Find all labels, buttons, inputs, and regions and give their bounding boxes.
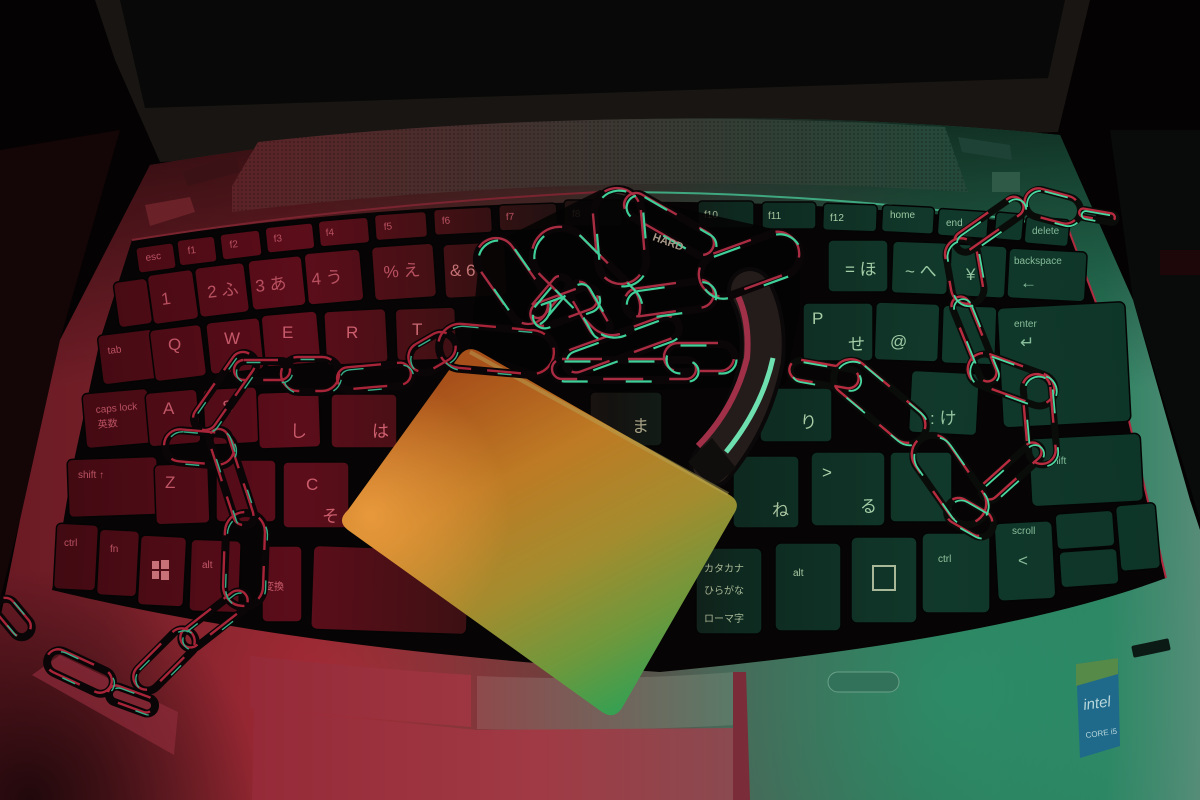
function key row: esc [145, 251, 162, 264]
QWERTY key row: W [224, 329, 240, 348]
number key row: % え [383, 260, 421, 282]
port slot [1131, 638, 1171, 658]
function key row: f4 [325, 227, 335, 239]
touchpad surface [252, 708, 735, 800]
home key row: し [290, 422, 307, 441]
home key row: S [222, 397, 233, 416]
QWERTY key row: @ [890, 332, 907, 351]
function key row: f12 [830, 213, 844, 224]
number key row: & 6 [450, 261, 476, 280]
function key row: f2 [229, 239, 239, 251]
side reflections [0, 130, 1200, 600]
number key row: ~ へ [905, 262, 937, 281]
bottom key row: alt [202, 560, 213, 571]
left touchpad button [250, 656, 471, 727]
function key row: f11 [768, 211, 782, 222]
right touchpad button [477, 672, 735, 730]
lower key row: > [822, 463, 832, 482]
central chain pile [468, 186, 808, 382]
home key row: 英数 [97, 416, 118, 431]
bottom key row: fn [110, 544, 118, 555]
keyboard well [52, 202, 1166, 672]
home key row: は [372, 422, 389, 441]
home key row: A [163, 399, 175, 418]
lower key row: る [860, 497, 877, 516]
QWERTY key row: せ [848, 335, 865, 354]
lower key row: shift ↑ [78, 470, 104, 481]
number key row: 1 [160, 289, 172, 309]
hinge clips [145, 137, 1020, 226]
QWERTY key row: P [812, 309, 823, 328]
number key row: ← [1020, 273, 1037, 292]
number key row [113, 240, 1087, 328]
bottom key row: 変換 [264, 580, 284, 593]
windows key icon [152, 560, 169, 580]
menu key icon [873, 566, 895, 590]
QWERTY key row: ↵ [1020, 333, 1034, 352]
function key row: f10 [704, 210, 718, 221]
lower key row: Z [165, 473, 175, 492]
number key row: 4 う [311, 267, 343, 289]
bottom key row [53, 502, 1161, 635]
touchpad divider [733, 672, 750, 800]
bottom key row: カタカナ [704, 563, 744, 575]
keyboard keys [53, 200, 1161, 635]
home key row [82, 370, 980, 449]
QWERTY key row [97, 302, 1131, 428]
home key row: : け [930, 409, 956, 428]
lower key row [67, 433, 1144, 528]
bottom key row: ひらがな [704, 584, 744, 597]
intel sticker: intel [1082, 693, 1112, 714]
left chain [0, 322, 558, 717]
left palm label [32, 655, 178, 755]
bottom key row: scroll [1012, 526, 1035, 537]
lower key row: そ [322, 507, 339, 526]
keyboard rim highlights [132, 192, 1166, 578]
home key row: り [800, 413, 817, 432]
function key row [135, 200, 1070, 274]
intel sticker [1076, 658, 1120, 758]
padlock body [342, 349, 737, 715]
function key row: f6 [442, 216, 451, 227]
bottom key row: < [1018, 551, 1028, 570]
bottom key row: ローマ字 [704, 613, 744, 625]
number key row: backspace [1014, 256, 1062, 267]
lower key row: shift [1048, 456, 1067, 467]
home key row: caps lock [95, 401, 139, 416]
QWERTY key row: Q [168, 335, 181, 354]
number key row: 3 あ [254, 274, 287, 296]
number key row: ¥ [965, 265, 976, 284]
QWERTY key row: enter [1014, 319, 1037, 330]
function key row: home [890, 210, 915, 221]
shackle [688, 290, 773, 488]
QWERTY key row: E [282, 323, 293, 342]
bottom key row: ctrl [64, 538, 77, 549]
function key row: delete [1032, 226, 1060, 237]
lower key row: ね [772, 501, 789, 520]
QWERTY key row: tab [107, 344, 123, 357]
chain engraving: HARD [651, 232, 685, 254]
function key row: end [946, 218, 963, 229]
speaker grille [232, 119, 968, 212]
number key row: = ほ [845, 260, 877, 279]
palm rest [32, 638, 1171, 800]
function key row: f8 [572, 209, 581, 220]
bottom key row: ctrl [938, 554, 951, 565]
chain mass shadow [470, 190, 800, 392]
QWERTY key row: T [412, 320, 422, 339]
QWERTY key row: R [346, 323, 358, 342]
function key row: f1 [187, 245, 197, 257]
right chain [788, 185, 1118, 543]
lower key row: C [306, 475, 318, 494]
home key row: ま [632, 417, 649, 436]
function key row: f5 [383, 221, 393, 233]
fingerprint reader [828, 672, 899, 692]
intel sticker: CORE i5 [1085, 727, 1118, 740]
laptop screen lid [95, 0, 1090, 162]
function key row: f7 [506, 212, 515, 223]
function key row: f3 [273, 233, 283, 245]
bottom key row: alt [793, 568, 804, 579]
number key row: 2 ふ [206, 279, 239, 302]
